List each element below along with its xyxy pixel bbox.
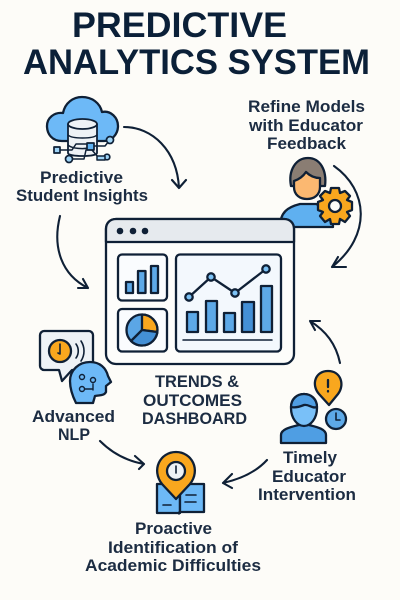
icon: location pin on open book <box>157 452 204 514</box>
arrow: educator feedback to dashboard <box>332 166 361 267</box>
label: Predictive Student Insights: Predictive <box>40 169 123 187</box>
arrow: intervention to identification <box>223 460 267 488</box>
mini bar chart panel <box>118 254 167 300</box>
label: Proactive Identification of Academic Difficulties: Proactive <box>135 520 212 538</box>
icon: alert pin <box>315 371 341 405</box>
combined line and bar chart panel <box>176 254 281 352</box>
label: Timely Educator Intervention <box>258 449 356 504</box>
label: Proactive Identification of Academic Difficulties: Identification of <box>108 539 239 557</box>
label: Proactive Identification of Academic Difficulties <box>85 520 261 575</box>
label: Advanced NLP <box>32 408 115 444</box>
icon: speech bubble and NLP head <box>40 331 111 403</box>
icon: educator with gear <box>280 158 352 227</box>
arrow: intervention to dashboard <box>310 321 340 363</box>
label: Refine Models with Educator Feedback: Refine Models <box>248 98 365 116</box>
label: Refine Models with Educator Feedback: Feedback <box>267 135 347 153</box>
label: Trends & Outcomes Dashboard: TRENDS & <box>155 373 239 391</box>
label: Refine Models with Educator Feedback: with Educator <box>248 117 364 135</box>
label: Trends & Outcomes Dashboard: DASHBOARD <box>142 410 247 428</box>
pie chart panel <box>118 309 167 352</box>
label: Timely Educator Intervention: Educator <box>272 468 347 486</box>
icon: alert mark <box>327 380 329 392</box>
title <box>23 6 370 82</box>
dashboard window <box>106 219 294 364</box>
icon: educator person and clock <box>281 394 346 443</box>
label: Advanced NLP: NLP <box>58 426 90 444</box>
arrow: NLP to identification <box>100 441 144 469</box>
arrow: insights to dashboard left <box>57 216 88 288</box>
title: PREDICTIVE <box>72 6 287 45</box>
label: Trends & Outcomes Dashboard: OUTCOMES <box>143 392 242 410</box>
label: Timely Educator Intervention: Intervention <box>258 486 356 504</box>
title: ANALYTICS SYSTEM <box>23 43 370 82</box>
label: Trends & Outcomes Dashboard <box>142 373 247 428</box>
label: Refine Models with Educator Feedback <box>248 98 365 153</box>
icon: cloud database <box>47 97 118 162</box>
window control dots <box>117 228 148 234</box>
arrow: insights to dashboard top <box>124 127 186 188</box>
label: Predictive Student Insights: Student Insights <box>16 187 148 205</box>
label: Timely Educator Intervention: Timely <box>283 449 338 467</box>
label: Advanced NLP: Advanced <box>32 408 115 426</box>
label: Predictive Student Insights <box>16 169 148 205</box>
label: Proactive Identification of Academic Difficulties: Academic Difficulties <box>85 557 261 575</box>
